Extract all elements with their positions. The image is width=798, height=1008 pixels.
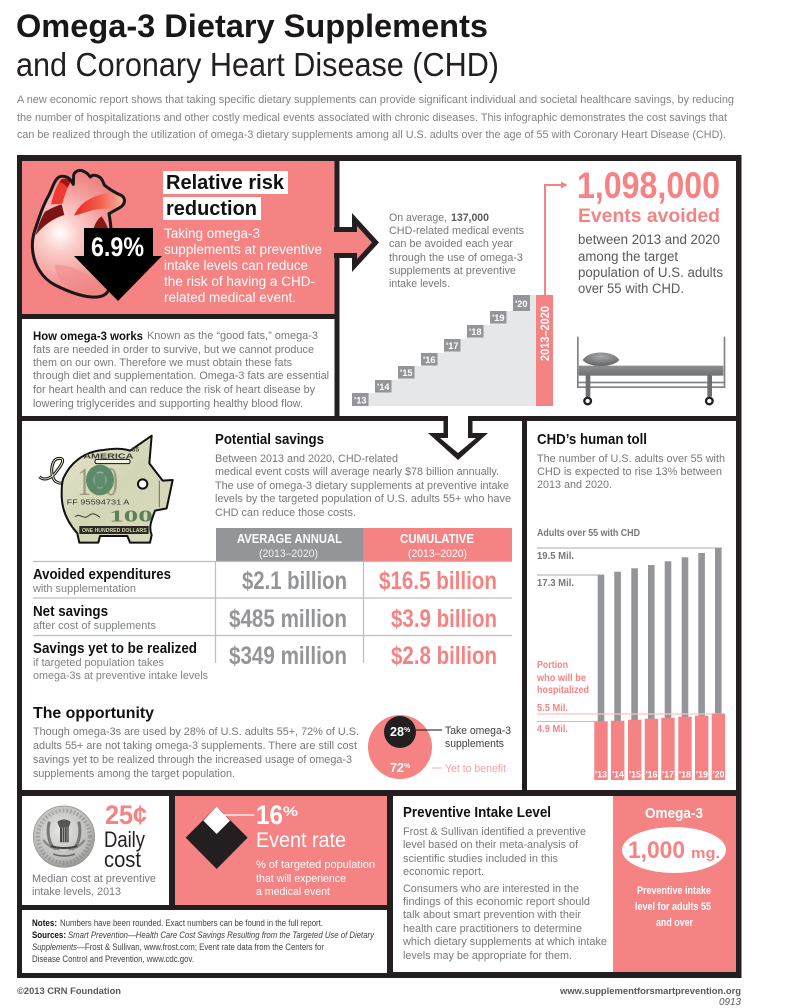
- panel: preventive intake level: findings of this economic report should: [403, 896, 590, 908]
- heading and text: potential savings: CHD can reduce those costs.: [215, 507, 356, 519]
- chart: adults over 55 with CHD: '14: [612, 770, 624, 780]
- text block: the risk of having a CHD-: [164, 274, 315, 289]
- panel: notes and sources: Disease Control and Prevention, www.cdc.gov.: [32, 954, 194, 964]
- chart: adults over 55 with CHD: 5.5 Mil.: [537, 703, 568, 714]
- panel: notes and sources: Supplements: [32, 942, 78, 952]
- chart: adults over 55 with CHD: '18: [679, 770, 691, 780]
- panel: preventive intake level: Consumers who are interested in the: [403, 883, 579, 895]
- intro text: the number of hospitalizations and other costly medical events associated with chronic diseases. This infographic demonstrates the cost savings that: [17, 112, 727, 124]
- heading and text: potential savings: The use of omega-3 dietary supplements at preventive intake: [215, 480, 509, 492]
- icon: heart: [32, 170, 124, 297]
- caption: [32, 873, 156, 898]
- panel: omega-3 dose: and over: [656, 917, 694, 929]
- text block: among the target: [578, 249, 678, 264]
- heading and text: potential savings: levels by the targeted population of U.S. adults 55+ who have: [215, 493, 511, 505]
- panel: notes and sources: [22, 910, 387, 973]
- chart: adults over 55 with CHD: Adults over 55 with CHD: [537, 528, 640, 539]
- panel: how omega-3 works: for heart health and can reduce the risk of heart disease by: [33, 384, 315, 396]
- text: 137,000 events: through the use of omega-3: [389, 252, 523, 264]
- caption: intake levels, 2013: [32, 886, 121, 898]
- heading: relative risk reduction: Relative risk: [166, 172, 285, 194]
- table: savings: $485 million: [229, 605, 347, 633]
- heading and text: CHD’s human toll: [537, 431, 647, 448]
- chart: staircase of years: '19: [492, 313, 504, 324]
- text block: supplements at preventive: [164, 242, 322, 257]
- panel: notes and sources: Sources:: [32, 930, 66, 940]
- icon: quarter coin: [33, 806, 95, 867]
- chart: adults over 55 with CHD: [536, 528, 725, 780]
- title: [16, 8, 499, 83]
- title: and Coronary Heart Disease (CHD): [16, 46, 499, 83]
- table: savings: after cost of supplements: [33, 620, 157, 632]
- chart: adults over 55 with CHD: 17.3 Mil.: [537, 578, 574, 589]
- table: savings: $2.1 billion: [242, 567, 347, 595]
- panel: event rate: [175, 796, 387, 905]
- text block: related medical event.: [164, 290, 296, 305]
- text block: [164, 226, 322, 305]
- panel: preventive intake level: levels may be appropriate for them.: [403, 950, 572, 962]
- chart: adults over 55 with CHD: '17: [662, 770, 674, 780]
- panel: notes and sources: —Frost & Sullivan, www.frost.com; Event rate data from the Centers for: [77, 942, 324, 952]
- panel: notes and sources: Notes:: [32, 918, 57, 928]
- panel: how omega-3 works: Known as the “good fats,” omega-3: [147, 330, 318, 342]
- table: savings: $16.5 billion: [379, 567, 497, 595]
- table: savings: CUMULATIVE: [400, 531, 474, 546]
- heading and text: [537, 431, 725, 491]
- stat: 25 cents: [104, 800, 147, 872]
- heading and text: potential savings: medical event costs will average nearly $78 billion annually.: [215, 466, 499, 478]
- panel: how omega-3 works: them on our own. Therefore we must obtain these fats: [33, 357, 292, 369]
- icon: diamond: [186, 807, 254, 869]
- text: the opportunity: savings yet to be realized through the increased usage of omega-3: [33, 754, 352, 766]
- panel: preventive intake level: talk about smart prevention with their: [403, 909, 581, 921]
- icon: piggy bank made of a dollar bill: FF 95594731 A: [67, 497, 130, 506]
- chart: 28% vs 72% circle: 28: [390, 725, 404, 739]
- heading: relative risk reduction: [163, 171, 288, 220]
- panel: omega-3 dose: Preventive intake: [637, 885, 711, 897]
- stat: 25 cents: 25¢: [105, 800, 147, 830]
- text: the opportunity: adults 55+ are not taking omega-3 supplements. There are still cost: [33, 740, 357, 752]
- caption: a medical event: [256, 886, 330, 898]
- chart: 28% vs 72% circle: 72: [390, 761, 404, 775]
- icon: piggy bank made of a dollar bill: 85: [132, 447, 139, 454]
- table: savings: Avoided expenditures: [33, 566, 171, 583]
- panel: omega-3 dose: Omega-3: [645, 805, 703, 822]
- footer: www.supplementforsmartprevention.org: [559, 986, 741, 997]
- text block: [578, 232, 723, 296]
- footer: 0913: [719, 997, 741, 1008]
- intro text: A new economic report shows that taking specific dietary supplements can provide significant individual and societal healthcare savings, by reducing: [17, 94, 734, 106]
- header: [16, 8, 734, 141]
- chart: staircase of years: '20: [515, 299, 528, 310]
- stat: 16% event rate: Event rate: [256, 829, 346, 852]
- heading and text: potential savings: Between 2013 and 2020, CHD-related: [215, 453, 398, 465]
- chart: staircase of years: '15: [400, 368, 413, 379]
- text: 137,000 events: 137,000: [451, 212, 489, 224]
- footer: [17, 986, 741, 1008]
- chart: adults over 55 with CHD: hospitalized: [537, 684, 589, 696]
- chart: 28% vs 72% circle: [368, 715, 511, 779]
- panel: potential savings: [22, 421, 522, 790]
- stat: 16% event rate: 16: [256, 800, 283, 830]
- chart: staircase of years: '13: [354, 396, 366, 406]
- stat: 16% event rate: %: [283, 803, 299, 819]
- table: savings: $2.8 billion: [391, 642, 497, 670]
- caption: [256, 859, 375, 898]
- chart: adults over 55 with CHD: '16: [646, 770, 658, 780]
- table: savings: Net savings: [33, 603, 108, 620]
- text block: over 55 with CHD.: [578, 281, 684, 296]
- arrow: down to savings: [428, 414, 488, 460]
- chart: adults over 55 with CHD: '20: [712, 770, 724, 780]
- callout: 1,000 mg: [622, 827, 726, 873]
- panel: events avoided: [340, 161, 736, 416]
- text block: population of U.S. adults: [578, 265, 723, 280]
- stat: 16% event rate: [256, 800, 346, 852]
- chart: staircase of years: '14: [377, 382, 390, 393]
- panel: preventive intake level: scientific studies included in this: [403, 853, 558, 865]
- panel: how omega-3 works: fats are needed in order to survive, but we cannot produce: [33, 344, 314, 356]
- chart: 28% vs 72% circle: %: [404, 763, 411, 770]
- panel: preventive intake level: [393, 796, 613, 972]
- chart: adults over 55 with CHD: '19: [696, 770, 708, 780]
- icon: piggy bank made of a dollar bill: 100: [77, 459, 118, 504]
- chart: staircase of years: [352, 295, 536, 406]
- table: savings: with supplementation: [32, 583, 136, 595]
- panel: how omega-3 works: [22, 319, 334, 416]
- stat: 1,098,000 events avoided: 1,098,000: [577, 165, 720, 206]
- heading and text: potential savings: Potential savings: [215, 431, 324, 448]
- panel: daily cost: [22, 796, 169, 905]
- arrow: right to events: [334, 213, 379, 272]
- text: the opportunity: supplements among the target population.: [33, 768, 235, 780]
- icon: piggy bank made of a dollar bill: 100: [109, 506, 153, 525]
- text: 137,000 events: can be avoided each year: [389, 238, 513, 250]
- arrow: to total: [545, 182, 568, 295]
- table: savings: (2013–2020): [408, 548, 467, 560]
- table: savings: AVERAGE ANNUAL: [237, 531, 342, 546]
- caption: % of targeted population: [256, 859, 375, 871]
- intro text: [17, 94, 734, 141]
- stat: 1,098,000 events avoided: [577, 165, 720, 227]
- table: savings: (2013–2020): [259, 548, 318, 560]
- text: the opportunity: Though omega-3s are used by 28% of U.S. adults 55+, 72% of U.S.: [33, 726, 359, 738]
- panel: how omega-3 works: through diet and supplementation. Omega-3 fats are essential: [33, 370, 329, 382]
- stat: 25 cents: cost: [104, 847, 141, 872]
- intro text: can be realized through the utilization of omega-3 dietary supplements among all U.S. adults over the age of 55 with Coronary Heart Disease (CHD).: [17, 129, 726, 141]
- text: 137,000 events: On average,: [389, 212, 447, 224]
- table: savings: if targeted population takes: [33, 657, 165, 669]
- panel: omega-3 dose: level for adults 55: [635, 901, 711, 913]
- panel: omega-3 dose: [613, 796, 736, 972]
- panel: notes and sources: Numbers have been rounded. Exact numbers can be found in the full report.: [60, 918, 323, 928]
- panel: preventive intake level: Preventive Intake Level: [403, 804, 551, 821]
- bar: 2013-2020 total: [536, 295, 553, 406]
- text: the opportunity: The opportunity: [33, 705, 154, 722]
- icon: down arrow 6.9%: 6.9%: [91, 232, 144, 262]
- table: savings: $349 million: [229, 642, 347, 670]
- panel: preventive intake level: economic report.: [403, 866, 484, 878]
- text block: Taking omega-3: [164, 226, 260, 241]
- caption: Median cost at preventive: [32, 873, 156, 885]
- chart: 28% vs 72% circle: supplements: [445, 738, 504, 750]
- chart: staircase of years: '18: [469, 327, 482, 338]
- callout: 1,000 mg: mg.: [691, 845, 720, 862]
- icon: hospital bed: [577, 337, 725, 404]
- chart: adults over 55 with CHD: 4.9 Mil.: [537, 724, 568, 735]
- icon: piggy bank made of a dollar bill: ONE HUNDRED DOLLARS: [82, 528, 147, 534]
- stat: 1,098,000 events avoided: Events avoided: [578, 205, 720, 227]
- icon: piggy bank made of a dollar bill: AMERICA: [83, 451, 134, 460]
- chart: 28% vs 72% circle: Yet to benefit: [445, 763, 506, 775]
- heading and text: 2013 and 2020.: [537, 479, 612, 491]
- text block: intake levels can reduce: [164, 258, 308, 273]
- text: 137,000 events: intake levels.: [389, 278, 450, 290]
- chart: staircase of years: '16: [423, 355, 436, 366]
- panel: how omega-3 works: lowering triglycerides and supporting healthy blood flow.: [33, 398, 303, 410]
- table: savings: $3.9 billion: [391, 605, 497, 633]
- text: 137,000 events: supplements at preventive: [389, 265, 516, 277]
- chart: 28% vs 72% circle: %: [404, 727, 411, 734]
- icon: down arrow 6.9%: [74, 228, 162, 301]
- heading and text: potential savings: [215, 431, 511, 519]
- chart: adults over 55 with CHD: Portion: [537, 659, 568, 671]
- panel: notes and sources: Smart Prevention—Health Care Cost Savings Resulting from the Targeted Use of Dietary: [68, 930, 375, 940]
- chart: adults over 55 with CHD: '15: [629, 770, 641, 780]
- panel: preventive intake level: which dietary supplements at which intake: [402, 936, 607, 948]
- chart: 28% vs 72% circle: Take omega-3: [445, 725, 511, 737]
- chart: staircase of years: '17: [446, 341, 458, 352]
- title: Omega-3 Dietary Supplements: [16, 8, 488, 44]
- icon: piggy bank made of a dollar bill: [39, 436, 173, 543]
- heading and text: CHD is expected to rise 13% between: [537, 466, 722, 478]
- table: savings: [32, 528, 512, 682]
- chart: adults over 55 with CHD: '13: [595, 770, 607, 780]
- callout: 1,000 mg: 1,000: [628, 837, 685, 864]
- text: 137,000 events: [389, 212, 524, 290]
- chart: adults over 55 with CHD: who will be: [536, 672, 586, 684]
- bar: 2013-2020 total: 2013–2020: [538, 306, 552, 361]
- heading: relative risk reduction: reduction: [166, 198, 257, 220]
- panel: how omega-3 works: How omega-3 works: [33, 329, 143, 343]
- footer: ©2013 CRN Foundation: [17, 986, 121, 997]
- black frame: [17, 155, 742, 978]
- stat: 25 cents: Daily: [104, 827, 145, 852]
- panel: preventive intake level: level based on their meta-analysis of: [403, 839, 579, 851]
- text: 137,000 events: CHD-related medical events: [389, 225, 524, 237]
- chart: adults over 55 with CHD: 19.5 Mil.: [537, 551, 574, 562]
- text: the opportunity: [33, 705, 359, 780]
- heading and text: The number of U.S. adults over 55 with: [537, 453, 725, 465]
- table: savings: Savings yet to be realized: [33, 640, 197, 657]
- table: savings: omega-3s at preventive intake levels: [33, 670, 209, 682]
- panel: relative risk reduction: [22, 161, 334, 314]
- panel: preventive intake level: Frost & Sullivan identified a preventive: [403, 826, 586, 838]
- panel: preventive intake level: health care practitioners to determine: [403, 923, 582, 935]
- caption: that will experience: [256, 873, 346, 885]
- panel: CHD's human toll: [527, 421, 736, 790]
- text block: between 2013 and 2020: [578, 232, 720, 247]
